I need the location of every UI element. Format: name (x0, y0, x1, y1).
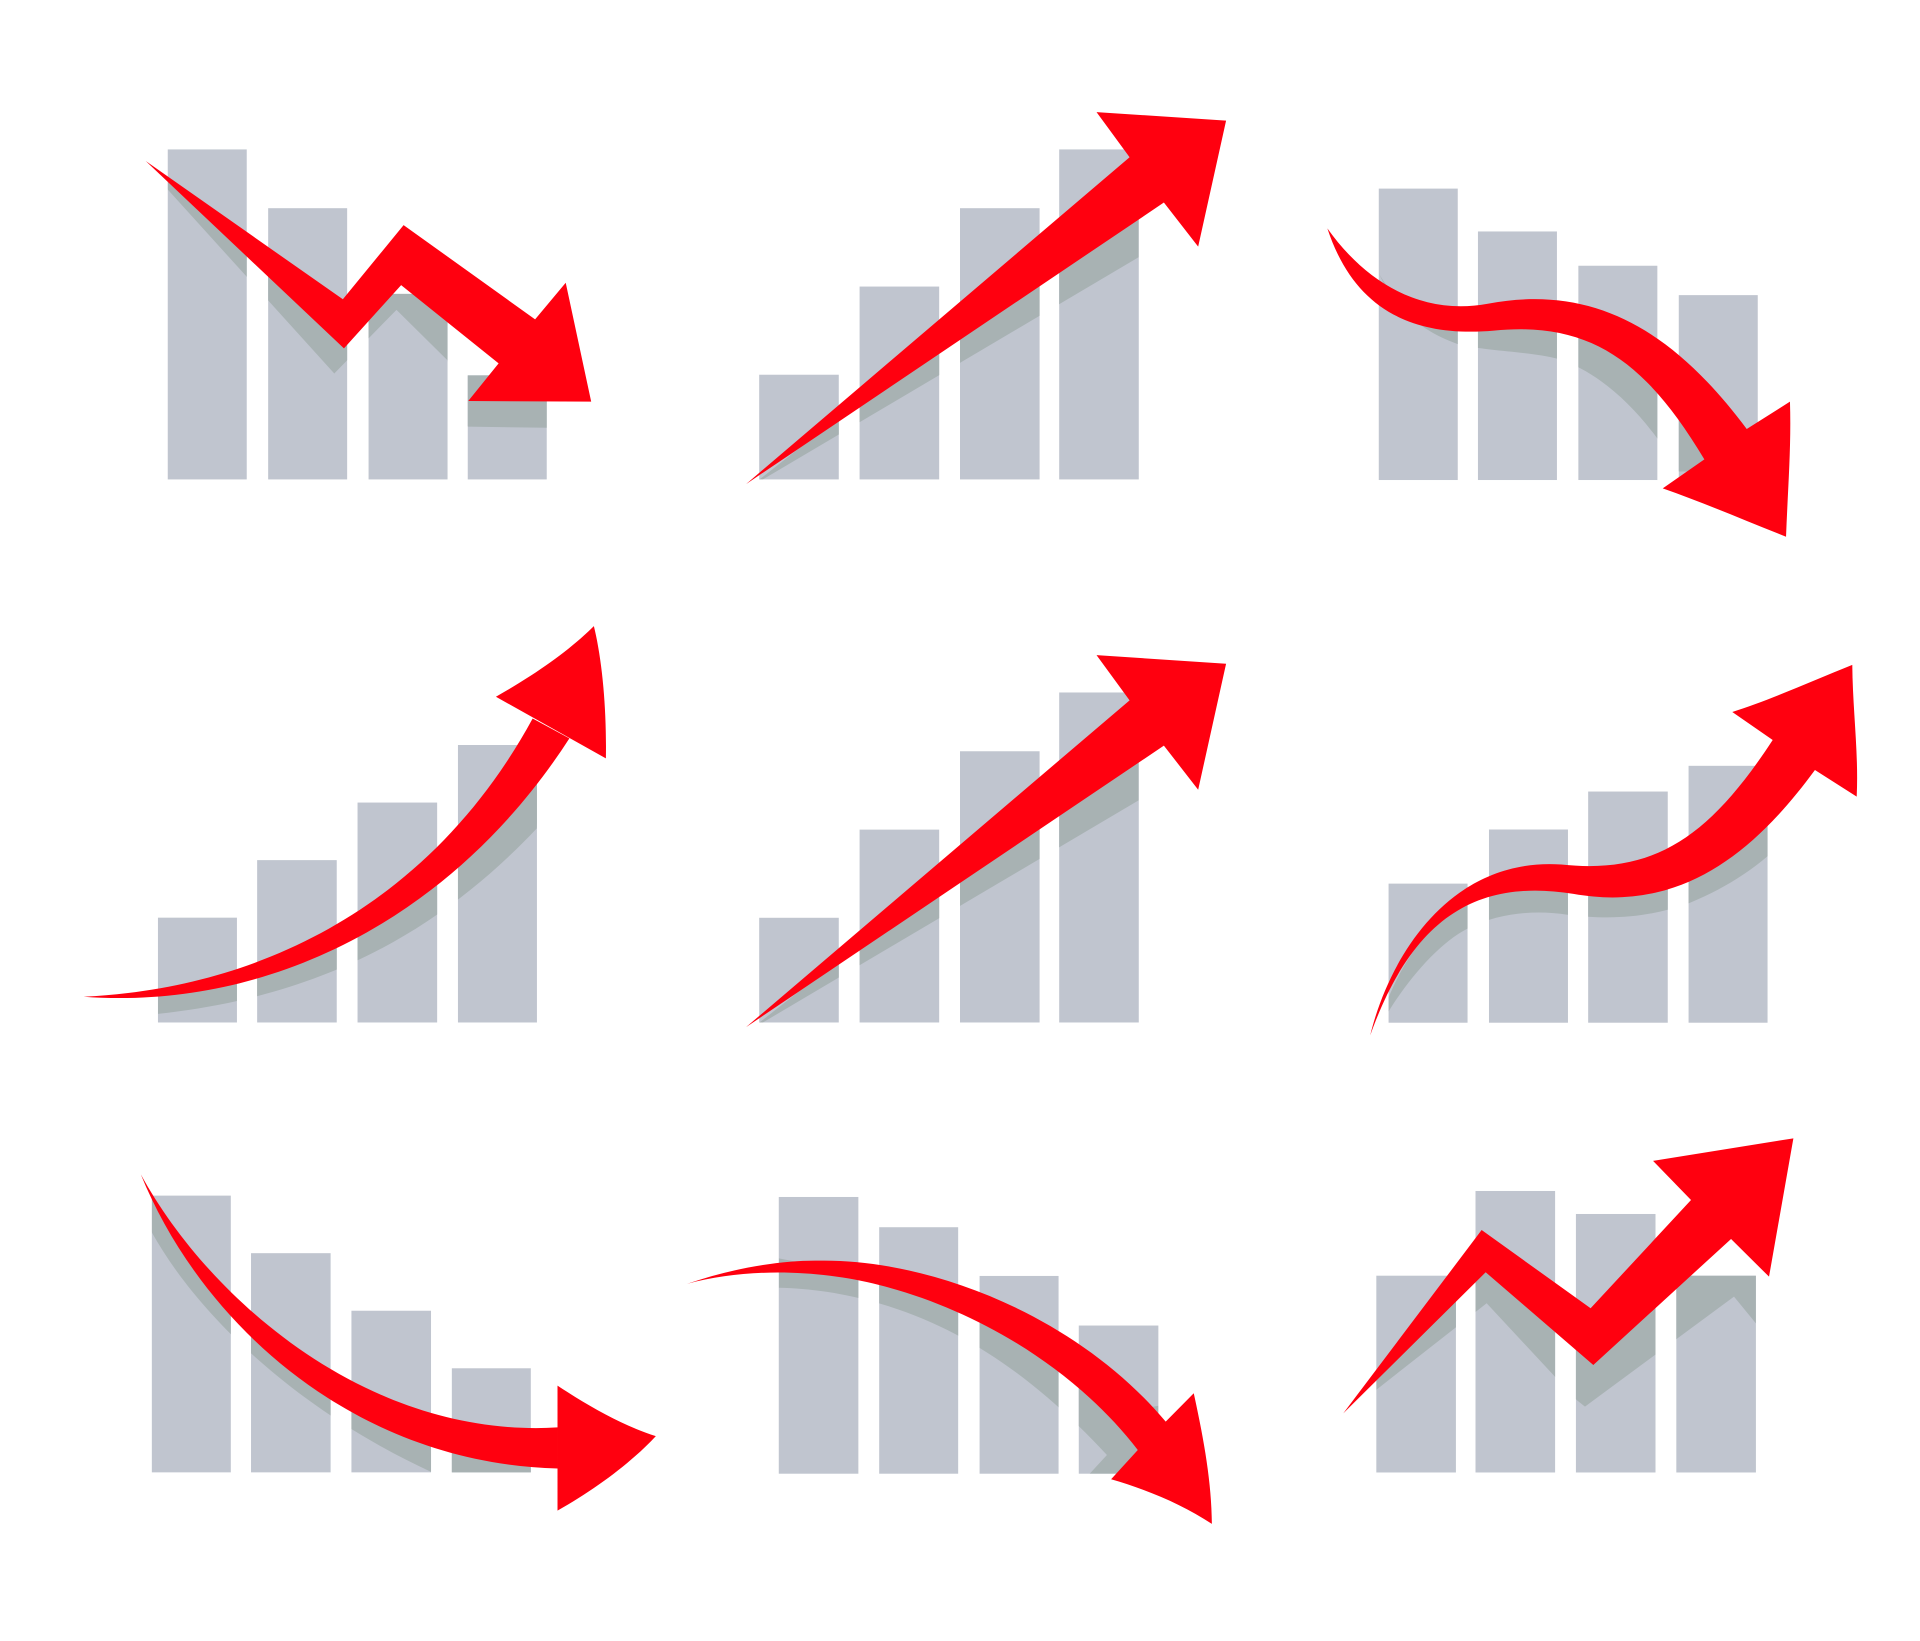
bars: chart 8 (779, 1197, 1158, 1474)
bars: chart 7 (152, 1196, 531, 1472)
arrow: chart 2 (746, 112, 1226, 484)
arrow shadow: chart 7 (152, 1200, 531, 1472)
arrow: chart 5 (746, 655, 1226, 1027)
arrow shadow: chart 5 (749, 751, 1139, 1030)
arrow shadow: chart 3 (1379, 273, 1708, 471)
bars: chart 6 (1389, 766, 1768, 1023)
arrow: chart 4 (84, 626, 606, 998)
bars: chart 9 (1376, 1191, 1756, 1472)
panel: chart 7, curved arrow falling to the right (141, 1174, 656, 1518)
panel: chart 1, zigzag arrow falling (144, 149, 591, 479)
arrow shadow: chart 9 (1376, 1272, 1756, 1406)
panel: chart 6, wavy arrow rising (1370, 665, 1857, 1035)
arrow shadow: chart 4 (158, 784, 537, 1014)
bars: chart 4 (158, 745, 537, 1022)
arrow: chart 8 (687, 1261, 1212, 1524)
bars: chart 5 (759, 692, 1139, 1022)
arrow: chart 9 (1343, 1138, 1793, 1413)
panel: chart 2, straight arrow rising (746, 112, 1226, 487)
infographic: nine bar charts with red trend arrows (84, 112, 1858, 1524)
arrow shadow: chart 2 (749, 208, 1139, 487)
panel: chart 4, curved arrow rising (84, 626, 606, 1022)
arrow shadow: chart 6 (1388, 826, 1768, 1012)
arrow: chart 1 (146, 161, 591, 402)
arrow: chart 3 (1327, 228, 1790, 537)
bars: chart 1 (168, 149, 547, 479)
panel: chart 5, straight arrow rising (746, 655, 1226, 1030)
arrow: chart 6 (1370, 665, 1857, 1035)
arrow shadow: chart 8 (779, 1258, 1158, 1474)
arrow: chart 7 (141, 1174, 656, 1511)
bars: chart 3 (1379, 189, 1758, 480)
panel: chart 8, arched arrow falling (687, 1197, 1212, 1524)
arrow shadow: chart 1 (168, 182, 547, 428)
panel: chart 9, zigzag arrow rising (1343, 1138, 1793, 1472)
bars: chart 2 (759, 149, 1139, 479)
panel: chart 3, wavy arrow falling (1327, 189, 1790, 537)
